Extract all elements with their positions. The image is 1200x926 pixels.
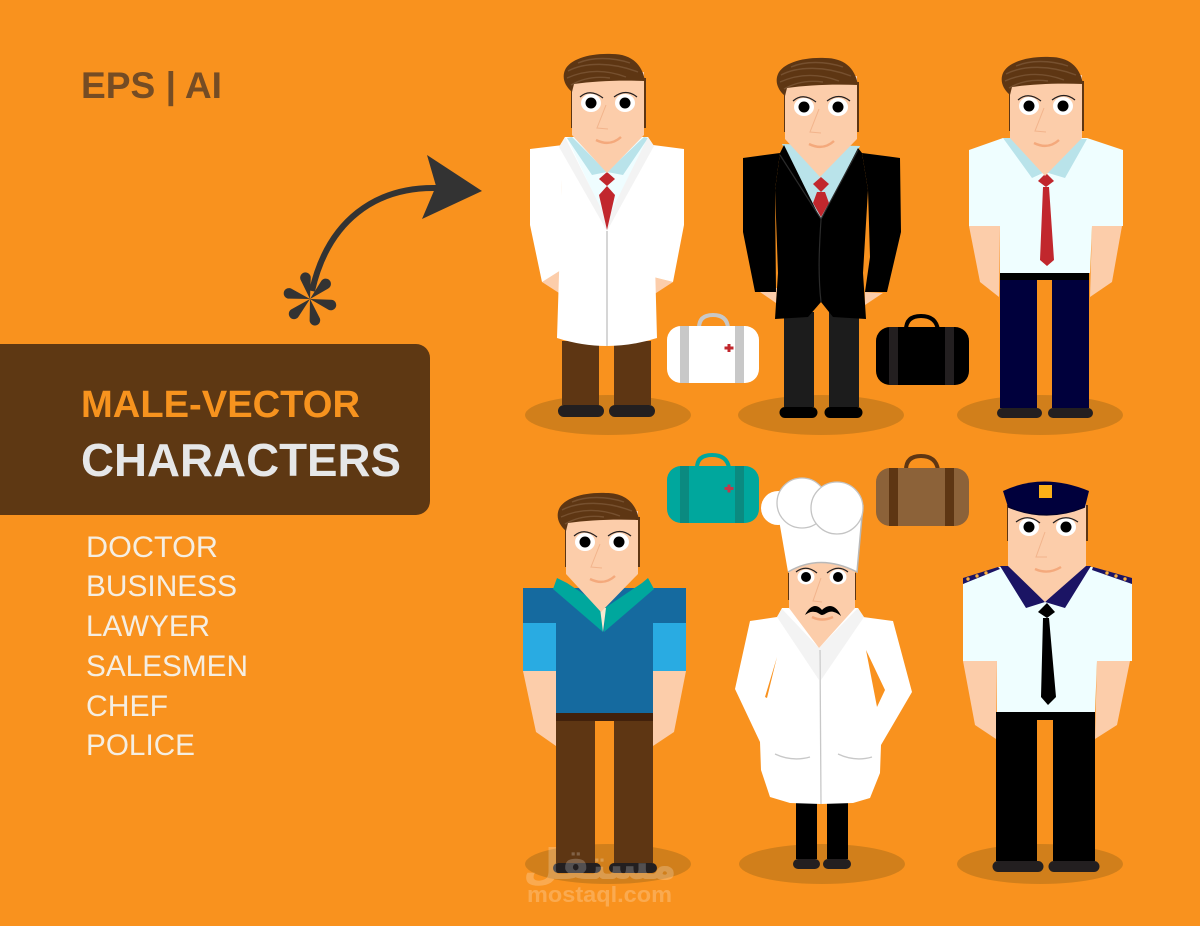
belt [1000,273,1089,280]
shirt [969,138,1123,273]
coat sleeves [530,145,684,282]
shoes [558,405,655,417]
face [788,550,856,648]
suit sleeves [743,153,901,292]
tie [1038,603,1056,705]
shoes [553,863,657,873]
head [564,54,646,173]
shoes [793,859,851,869]
trousers [1000,280,1089,408]
ground shadow [957,844,1123,884]
tie [813,177,829,217]
arms [523,671,686,746]
character list [86,531,248,762]
collar [1003,138,1087,178]
character: salesman [523,493,691,884]
collar [553,578,654,632]
arms [963,661,1130,739]
shoes [992,861,1100,872]
arms [969,226,1122,297]
tie [1038,173,1054,266]
lapels [559,137,654,231]
character list: BUSINESS [86,570,237,603]
undershirt [600,608,606,632]
chef hat [761,478,863,572]
police cap [1003,482,1089,515]
format label: EPS | AI [81,65,222,107]
character list: SALESMEN [86,650,248,683]
title line 1: MALE-VECTOR [81,384,360,426]
character: lawyer [957,57,1123,435]
tie [599,172,615,230]
epaulettes [963,567,1132,584]
icon: brown suitcase [876,456,969,526]
title line 2: CHARACTERS [81,434,401,486]
character: doctor [525,54,691,435]
character list: DOCTOR [86,531,218,564]
ground shadow [525,395,691,435]
character: chef [735,478,912,884]
shoes [780,407,863,418]
collar [1000,566,1091,608]
watermark: مستقل [523,840,677,889]
watermark url: mostaql.com [527,882,672,907]
hands [542,268,673,295]
coat body [557,137,657,346]
trousers [796,803,848,859]
face [1007,500,1088,602]
title panel [0,344,430,515]
trousers [996,712,1095,861]
character: businessman [738,58,904,435]
trousers [562,341,651,405]
icon: teal medical bag [667,455,759,523]
ground shadow [738,395,904,435]
sleeves [523,623,686,671]
trousers [784,312,859,407]
icon: white medical bag [667,315,759,383]
hands [760,288,883,305]
ground shadow [957,395,1123,435]
ground shadow [739,844,905,884]
belt [556,713,653,721]
icon: black briefcase [876,316,969,385]
shoes [997,408,1093,418]
coat centre seam [606,231,608,346]
trousers [556,721,653,863]
character list: POLICE [86,729,195,762]
curved arrow with asterisk [282,155,482,327]
head [558,493,640,612]
shirt [523,588,686,713]
shirt [963,567,1132,712]
suit seams [780,150,858,302]
character list: CHEF [86,690,168,723]
lapels [777,608,864,680]
ground shadow [525,844,691,884]
character: police officer [957,482,1132,884]
coat seam and pockets [775,650,872,804]
arm gaps [765,650,885,707]
shirt and collar [567,138,648,222]
character list: LAWYER [86,610,210,643]
head [777,58,859,177]
suit body [775,145,868,319]
shirt collar [782,144,860,224]
moustache [805,606,841,616]
head [1002,57,1084,176]
white coat [735,608,912,804]
